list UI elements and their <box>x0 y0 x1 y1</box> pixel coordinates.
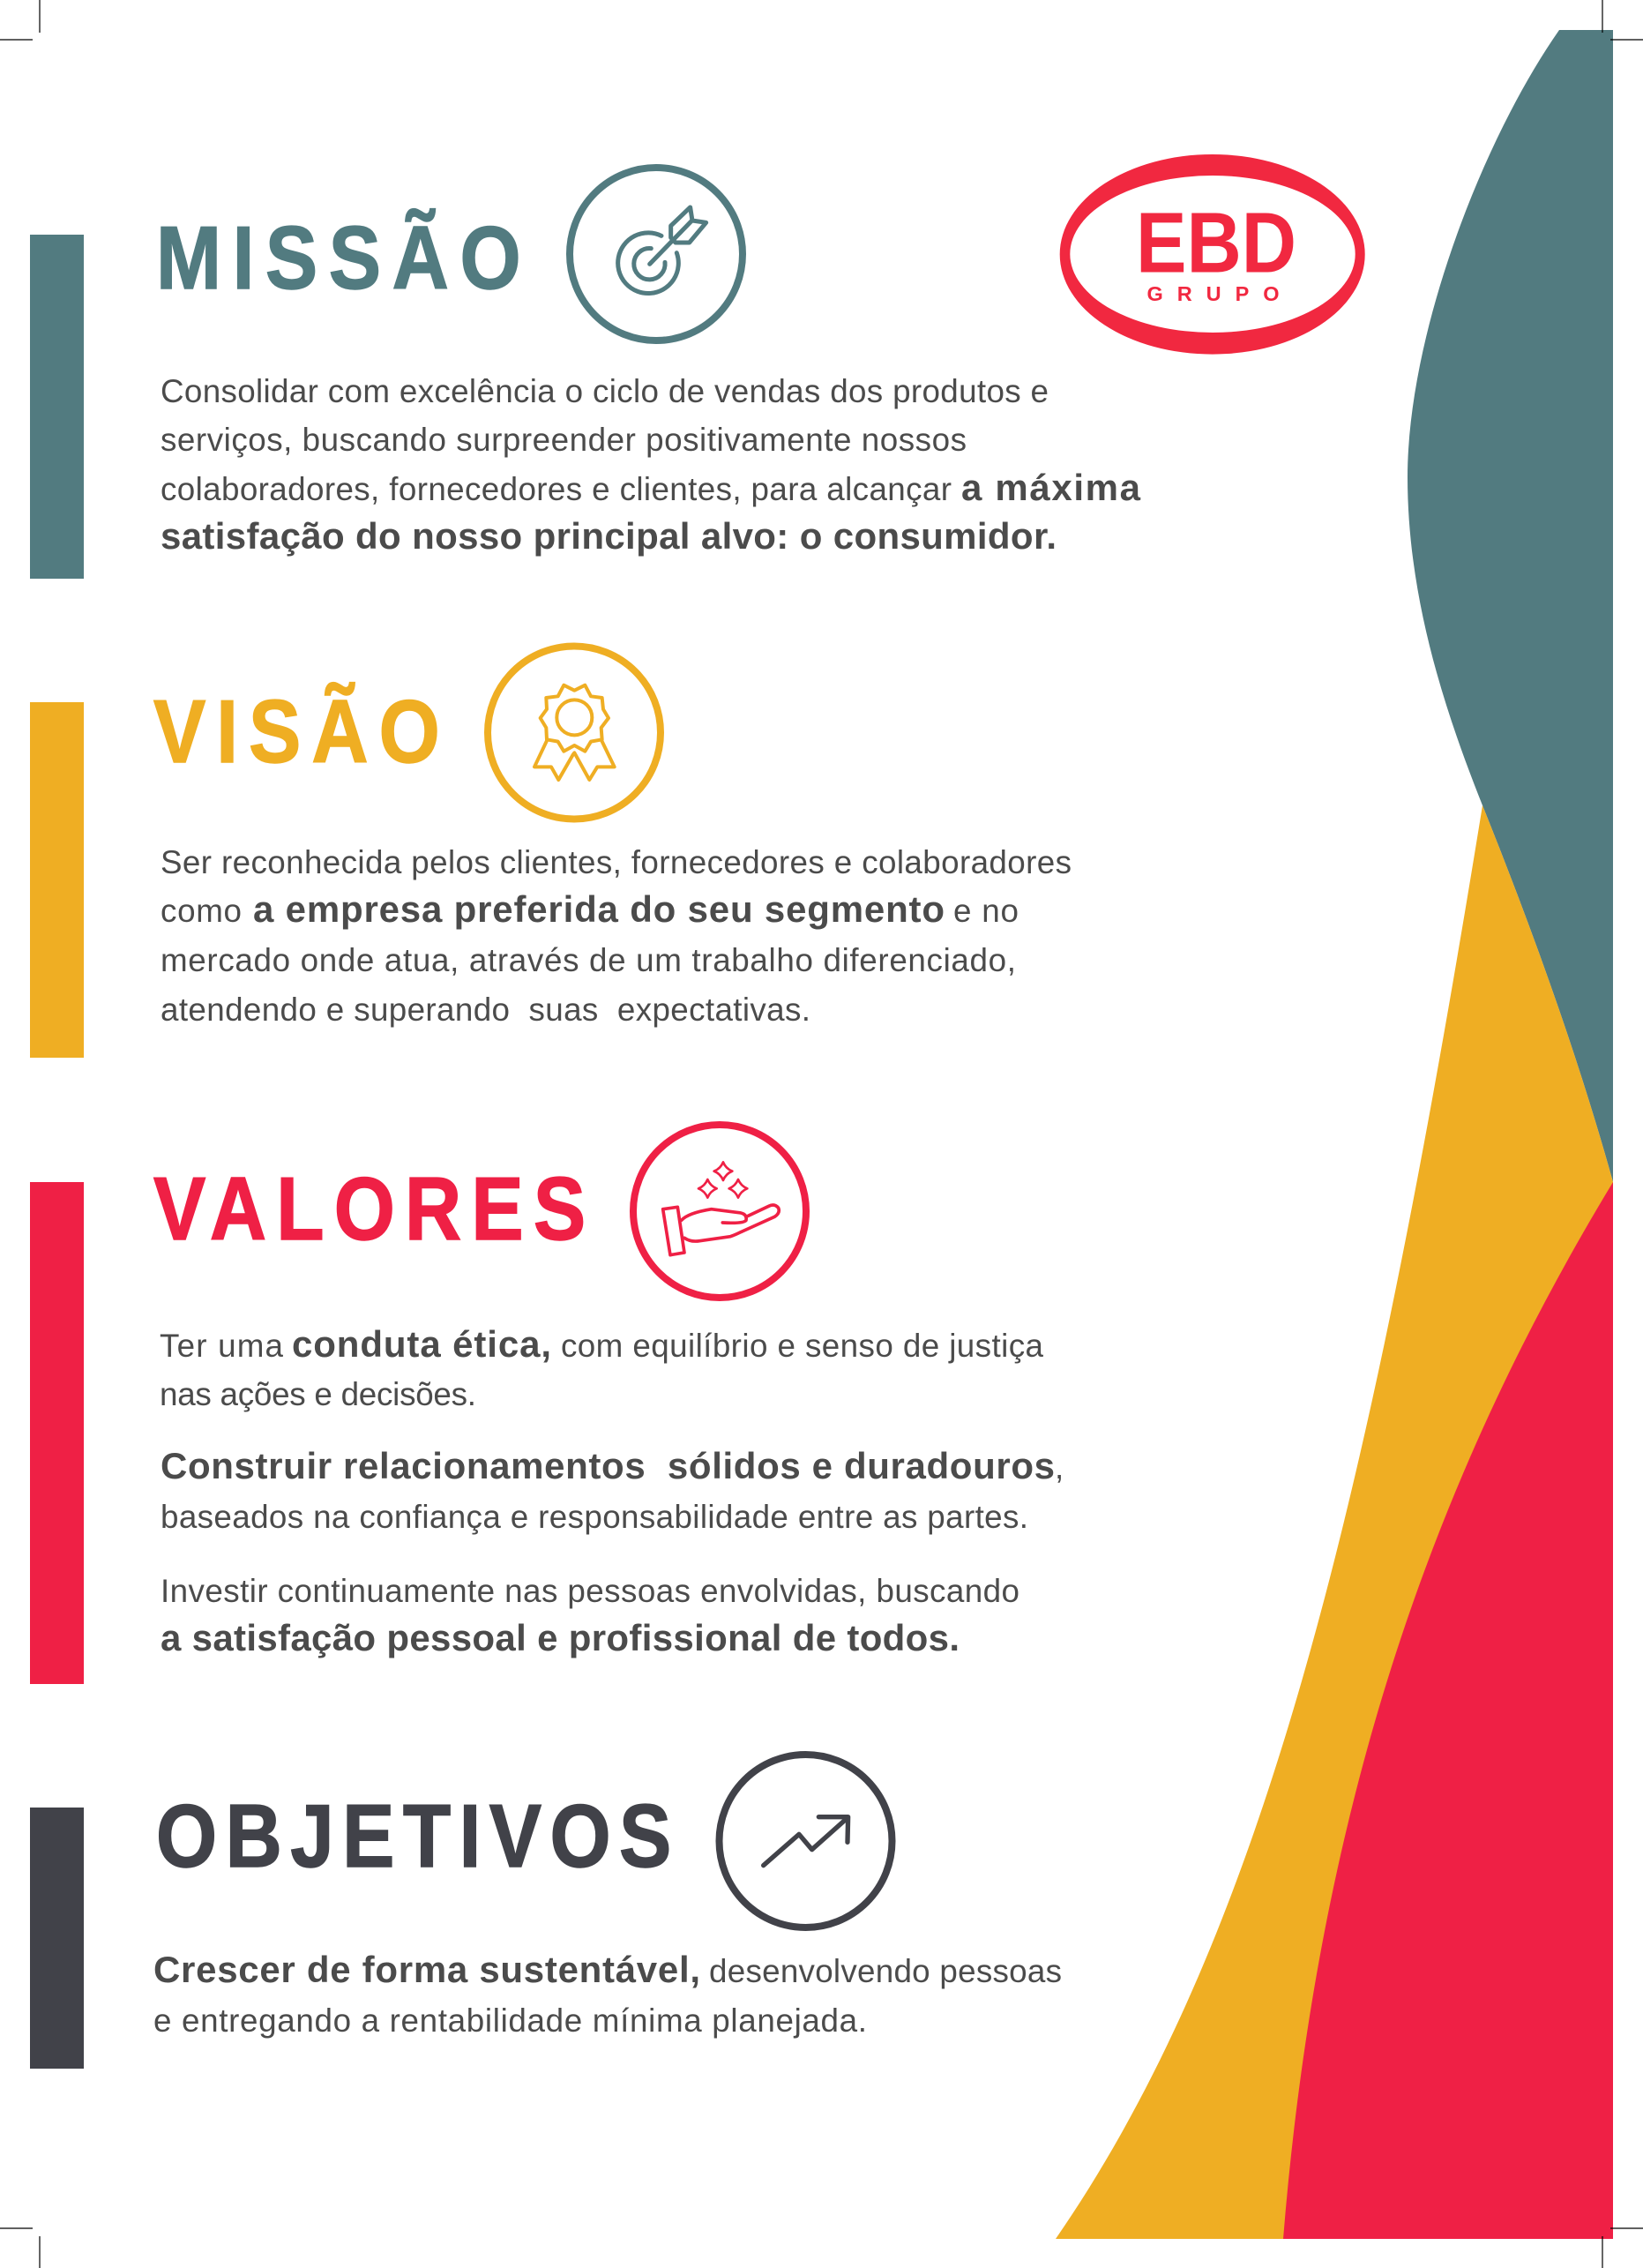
logo: EBD Grupo: EBD <box>1136 194 1296 291</box>
wave: teal <box>1408 30 1613 1182</box>
text: valores: nas ações e decisões. <box>160 1376 476 1412</box>
text: missão: serviços, buscando surpreender positivamente nossos <box>161 422 967 458</box>
text: objetivos: desenvolvendo pessoas <box>709 1953 1062 1989</box>
text: missão: satisfação do nosso principal alvo: o consumidor. <box>161 515 1057 557</box>
text: objetivos: Crescer de forma sustentável, <box>153 1949 700 1990</box>
logo: EBD Grupo <box>1060 154 1365 355</box>
text: valores: conduta ética, <box>292 1323 551 1365</box>
bar: objetivos <box>30 1808 84 2069</box>
text: valores: Investir continuamente nas pessoas envolvidas, buscando <box>161 1573 1019 1609</box>
icon: hand <box>633 1125 806 1298</box>
text: valores: , <box>1055 1449 1064 1486</box>
text: missão <box>161 373 1141 557</box>
text: valores: Construir relacionamentos sólidos e duradouros <box>161 1445 1055 1486</box>
text: valores: com equilíbrio e senso de justiça <box>561 1328 1044 1364</box>
title: visão: VISÃO <box>153 683 440 782</box>
icon: target <box>570 168 743 341</box>
bar: valores <box>30 1182 84 1684</box>
text: visão: como <box>161 893 242 929</box>
title: valores: VALORES <box>153 1160 586 1259</box>
text: objetivos <box>153 1949 1062 2039</box>
text: visão: atendendo e superando suas expectativas. <box>161 992 810 1028</box>
text: visão: e no <box>953 893 1019 929</box>
text: objetivos: e entregando a rentabilidade mínima planejada. <box>153 2002 867 2039</box>
bar: missão <box>30 235 84 579</box>
text: valores: baseados na confiança e responsabilidade entre as partes. <box>161 1499 1028 1535</box>
text: missão: a máxima <box>961 467 1141 508</box>
title: missão: MISSÃO <box>156 209 521 308</box>
bar: visão <box>30 702 84 1058</box>
icon: medal <box>488 646 661 819</box>
text: visão <box>161 844 1072 1028</box>
wave: red <box>1283 1182 1613 2239</box>
text: visão: Ser reconhecida pelos clientes, fornecedores e colaboradores <box>161 844 1072 880</box>
text: visão: mercado onde atua, através de um trabalho diferenciado, <box>161 942 1016 978</box>
text: missão: Consolidar com excelência o ciclo de vendas dos produtos e <box>161 373 1049 409</box>
text: valores: a satisfação pessoal e profissional de todos. <box>161 1617 960 1658</box>
text: valores: Ter uma <box>160 1328 284 1364</box>
text: missão: colaboradores, fornecedores e clientes, para alcançar <box>161 471 952 507</box>
text: valores <box>160 1323 1064 1658</box>
title: objetivos: OBJETIVOS <box>156 1787 671 1886</box>
wave: yellow <box>1056 805 1613 2239</box>
text: visão: a empresa preferida do seu segmento <box>253 888 945 930</box>
icon: growth chart <box>720 1755 892 1927</box>
logo: EBD Grupo: GRUPO <box>1146 282 1279 305</box>
